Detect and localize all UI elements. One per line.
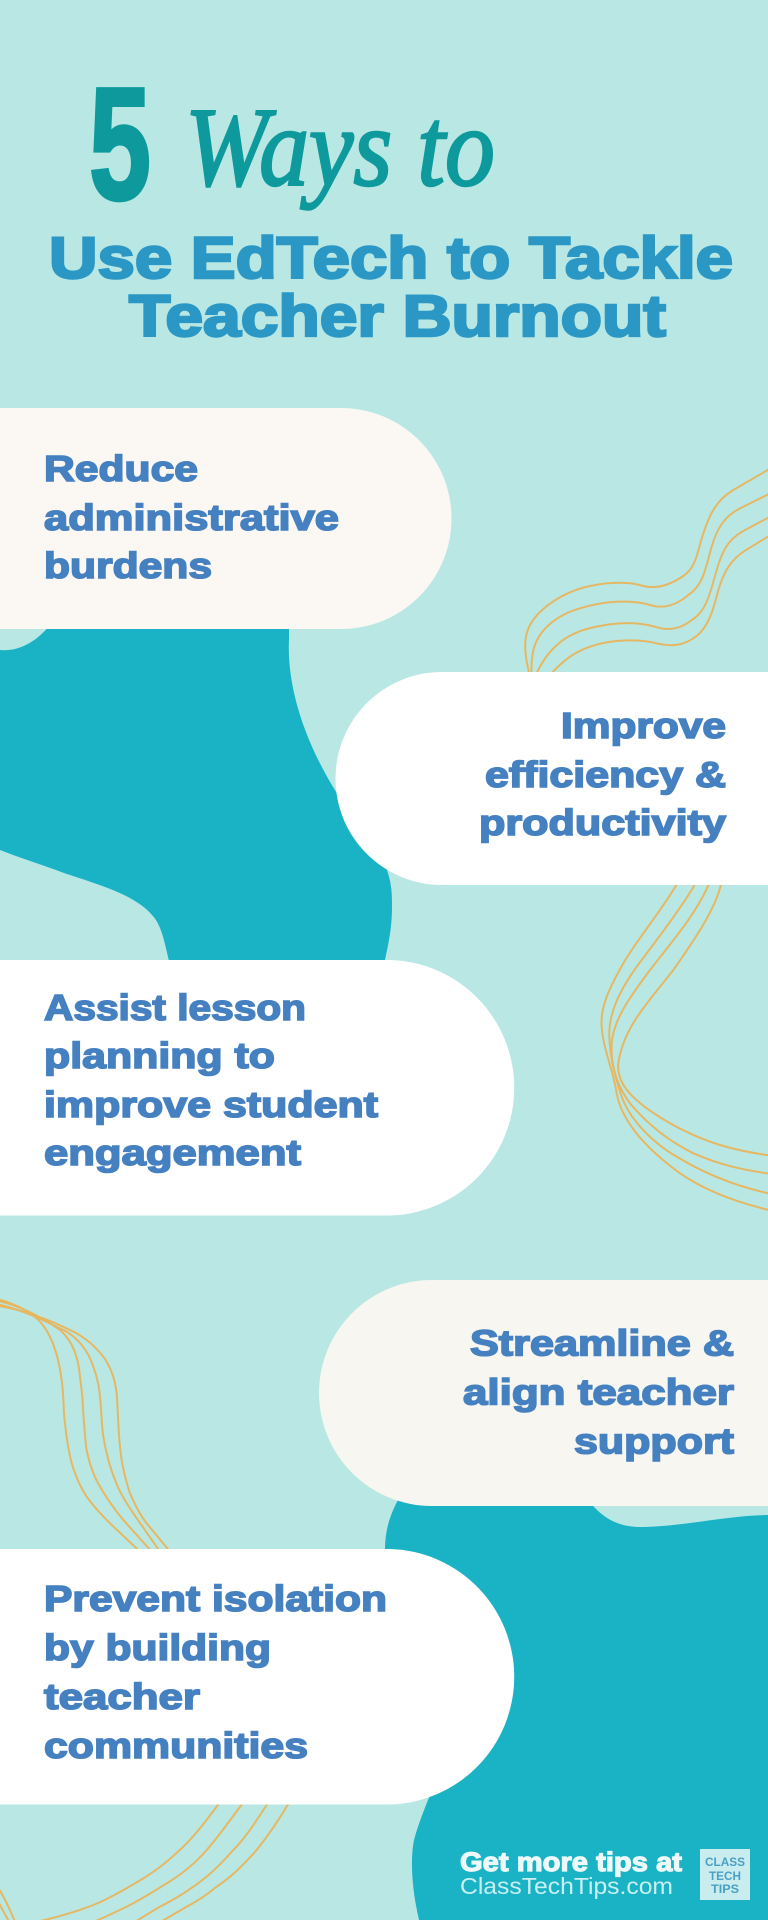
numeral 5: 5 [89, 54, 151, 233]
panel: assist lesson planning [0, 960, 514, 1216]
text: tip 4: support [574, 1420, 734, 1462]
script words: Ways to [185, 86, 495, 210]
decorative gold lines: bottom left [0, 1800, 291, 1920]
text: tip 3: Assist lesson [44, 987, 306, 1028]
text: tip 3: improve student [44, 1084, 378, 1125]
panel: reduce administrative burdens [0, 408, 452, 629]
blob: lower teal shape [385, 1500, 768, 1920]
decorative gold lines: lower left [0, 1299, 170, 1552]
text: tip 4 [463, 1322, 734, 1462]
heading: main title [49, 226, 733, 349]
title line 2: Teacher Burnout [129, 284, 666, 349]
panel: streamline and align teacher support [319, 1280, 768, 1506]
text: tip 5: by building [44, 1627, 271, 1668]
logo: Class Tech Tips: CLASS [705, 1855, 745, 1869]
text: tip 2: efficiency & [485, 754, 726, 795]
panel: prevent isolation [0, 1549, 514, 1804]
text: tip 5: teacher [44, 1676, 200, 1717]
panel: improve efficiency and productivity [336, 672, 768, 885]
decorative gold lines: top right [525, 469, 768, 677]
text: tip 5: Prevent isolation [44, 1578, 387, 1619]
text: tip 2: Improve [561, 705, 726, 746]
text: tip 3 [44, 987, 378, 1173]
text: tip 1 [44, 448, 339, 586]
logo: Class Tech Tips: TECH [709, 1869, 741, 1883]
footer call to action: Get more tips at [460, 1847, 682, 1877]
footer call to action [460, 1847, 682, 1899]
text: tip 5 [44, 1578, 387, 1766]
logo: Class Tech Tips: TIPS [711, 1882, 739, 1896]
text: tip 3: engagement [44, 1132, 301, 1173]
blob: upper teal shape [0, 625, 392, 965]
decorative gold lines: middle right [601, 882, 768, 1211]
text: tip 1: administrative [44, 497, 339, 538]
footer call to action: ClassTechTips.com [460, 1873, 673, 1899]
text: tip 4: align teacher [463, 1372, 734, 1412]
logo: Class Tech Tips [700, 1849, 750, 1900]
text: tip 1: Reduce [44, 448, 198, 489]
text: tip 3: planning to [44, 1035, 275, 1076]
heading: 5 Ways to [89, 54, 495, 233]
text: tip 5: communities [44, 1725, 308, 1766]
text: tip 2 [479, 705, 726, 843]
text: tip 2: productivity [479, 802, 726, 843]
text: tip 4: Streamline & [470, 1322, 734, 1364]
text: tip 1: burdens [44, 545, 212, 586]
title line 1: Use EdTech to Tackle [49, 226, 733, 291]
